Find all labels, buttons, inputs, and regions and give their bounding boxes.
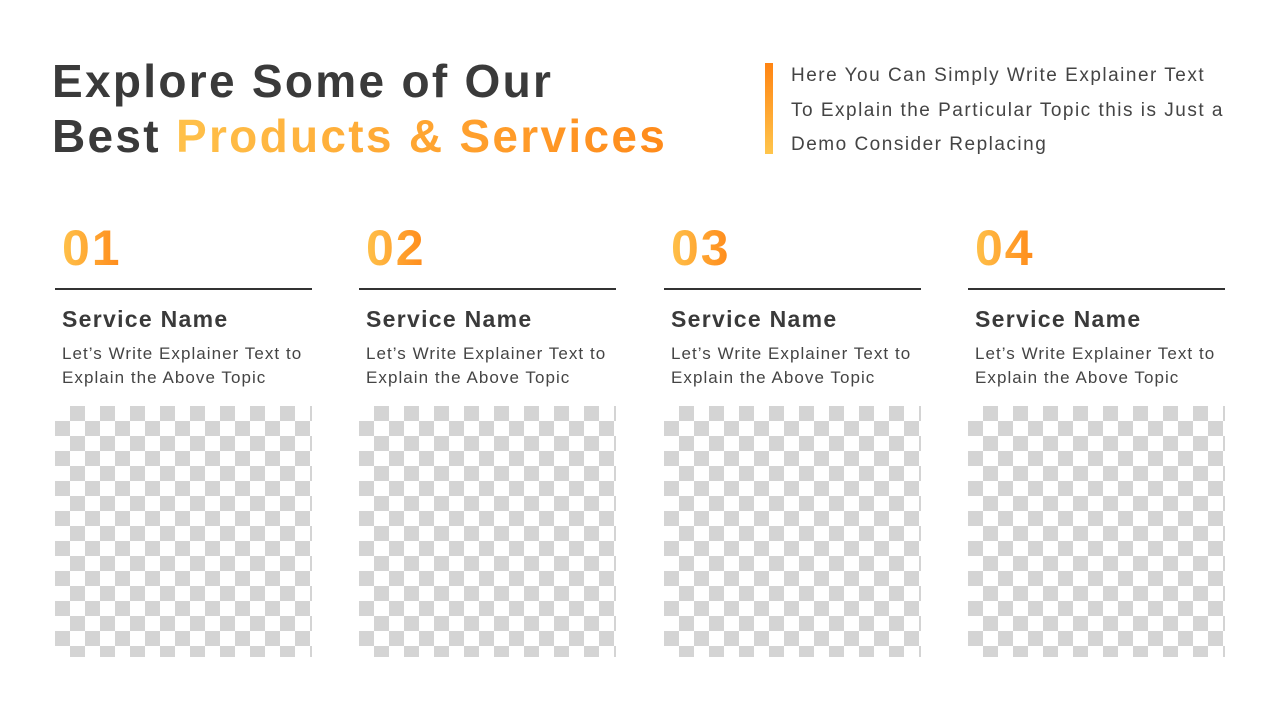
title: Best Products & Services [52,110,667,162]
title: Explore Some of Our [52,55,553,107]
intro text: To Explain the Particular Topic this is Just a [791,100,1224,120]
description: Let’s Write Explainer Text to [975,344,1215,363]
number 01: 01 [62,220,122,276]
description [62,344,302,387]
description: Let’s Write Explainer Text to [671,344,911,363]
panel: service 01 [55,220,312,657]
heading: Service Name [62,306,228,332]
description [975,344,1215,387]
description: Explain the Above Topic [366,368,570,387]
image placeholder [55,406,312,657]
description: Explain the Above Topic [975,368,1179,387]
heading: Service Name [671,306,837,332]
intro text: Demo Consider Replacing [791,134,1047,155]
number 04: 04 [975,220,1035,276]
description: Explain the Above Topic [671,368,875,387]
description: Let’s Write Explainer Text to [366,344,606,363]
number 02: 02 [366,220,426,276]
intro text: Here You Can Simply Write Explainer Text [791,65,1205,86]
description [671,344,911,387]
panel: service 04 [968,220,1225,657]
image placeholder [664,406,921,657]
panel: service 02 [359,220,616,657]
description: Let’s Write Explainer Text to [62,344,302,363]
panel: service 03 [664,220,921,657]
intro text [791,65,1224,155]
title [52,55,667,162]
image placeholder [968,406,1225,657]
number 03: 03 [671,220,731,276]
accent bar [765,63,773,154]
heading: Service Name [975,306,1141,332]
description: Explain the Above Topic [62,368,266,387]
heading: Service Name [366,306,532,332]
description [366,344,606,387]
image placeholder [359,406,616,657]
